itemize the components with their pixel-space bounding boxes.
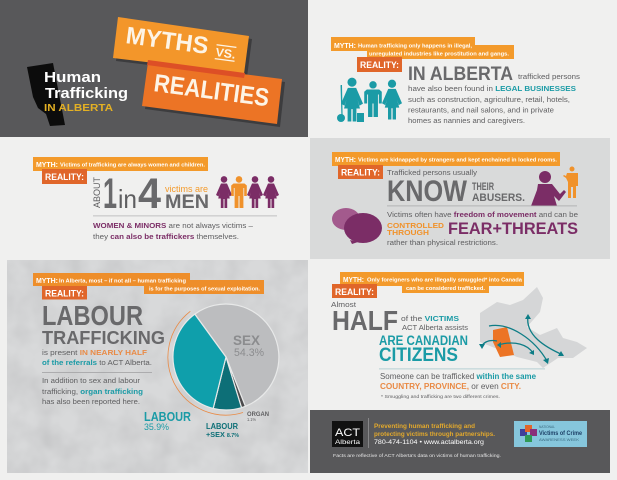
reality text: IN ALBERTA [408, 64, 513, 85]
icon: four people, one man [216, 176, 279, 208]
myth banner: MYTH: [343, 275, 364, 284]
reality text: such as construction, agriculture, retail, hotels, [408, 95, 570, 104]
labour trafficking text: LABOUR [42, 300, 143, 331]
trafficked within text: COUNTRY, PROVINCE, or even CITY. [380, 382, 521, 391]
icon: Alberta silhouette [27, 63, 65, 126]
fear and threats text: FEAR+THREATS [448, 219, 578, 238]
contact text: Preventing human trafficking and [374, 423, 475, 430]
know their abusers: KNOW [387, 175, 468, 208]
fear and threats text: rather than physical restrictions. [387, 238, 498, 247]
trafficked within text [380, 372, 537, 391]
logo: ACT Alberta: Alberta [335, 440, 361, 446]
organ trafficking text [42, 376, 143, 406]
myth banner: unregulated industries like prostitution and gangs. [369, 52, 509, 58]
reality text [93, 221, 254, 241]
reality tag: REALITY: [45, 288, 84, 300]
myth banner: In Alberta, most – if not all – human trafficking [59, 278, 187, 284]
reality text: homes as nannies and caregivers. [408, 116, 525, 125]
reality tag [42, 169, 87, 184]
pie labels: LABOUR [206, 422, 238, 431]
myth banner: MYTH: [36, 160, 58, 169]
reality text: trafficked persons [518, 72, 580, 81]
organ trafficking text: trafficking, organ trafficking [42, 387, 143, 396]
panel: footer [310, 410, 610, 473]
pie labels: ORGAN [247, 411, 269, 418]
organ trafficking text: has also been reported here. [42, 397, 140, 406]
reality text [408, 64, 580, 125]
reality text: restaurants, and nail salons, and in private [408, 106, 554, 114]
panel: illegal industries myth [331, 37, 580, 125]
statistic: about 1 in 4 victims are men: in [118, 184, 137, 214]
reality tag: REALITY: [341, 168, 380, 178]
almost half text: Almost [331, 300, 357, 309]
myth banner: Victims are kidnapped by strangers and kept enchained in locked rooms. [358, 158, 557, 164]
icon: victim and abuser [531, 166, 578, 206]
almost half text [331, 300, 468, 366]
almost half text: CITIZENS [379, 345, 458, 366]
heading: Human Trafficking in Alberta: IN ALBERTA [44, 103, 113, 114]
heading: Human Trafficking in Alberta [44, 69, 128, 114]
contact text [374, 423, 495, 446]
know their abusers: THEIR [472, 181, 494, 193]
pie labels [144, 332, 269, 439]
pie labels: 1.1% [247, 417, 256, 422]
organ trafficking text: In addition to sex and labour [42, 376, 140, 385]
pie chart [168, 304, 279, 415]
know their abusers: ABUSERS. [472, 192, 525, 204]
heading: Human Trafficking in Alberta: Human [44, 69, 101, 86]
panel: victims are women myth [33, 157, 279, 241]
reality tag: REALITY: [45, 172, 84, 183]
heading: Human Trafficking in Alberta: Trafficking [45, 85, 128, 102]
logo: National Victims of Crime Awareness Week: AWARENESS WEEK [539, 437, 579, 442]
trafficked within text: Someone can be trafficked within the same [380, 372, 537, 381]
myth banner: Only foreigners who are illegally smuggled* into Canada [367, 278, 523, 284]
reality tag: REALITY: [360, 60, 399, 71]
pie labels: SEX [233, 332, 261, 348]
pie labels: LABOUR [144, 409, 192, 424]
myth banner: can be considered trafficked. [406, 286, 485, 292]
pie labels: 35.9% [144, 422, 170, 433]
panel: sexual exploitation myth [7, 260, 308, 473]
know their abusers: Trafficked persons usually [387, 168, 477, 177]
reality text: they can also be traffickers themselves. [93, 232, 239, 241]
myth banner: Human trafficking only happens in illegal, [358, 44, 472, 50]
labour trafficking text [42, 300, 165, 367]
myth banner [33, 157, 208, 171]
labour trafficking text: of the referrals to ACT Alberta. [42, 358, 152, 367]
contact text: protecting victims through partnerships. [374, 431, 495, 438]
reality text: have also been found in LEGAL BUSINESSES [408, 84, 576, 93]
labour trafficking text: is present IN NEARLY HALF [42, 348, 147, 357]
logo: ACT Alberta [332, 421, 363, 447]
myth banner: Victims of trafficking are always women and children. [60, 162, 205, 168]
statistic: about 1 in 4 victims are men: 1 [103, 170, 117, 218]
logo: National Victims of Crime Awareness Week [514, 421, 587, 447]
sign: Myths vs. [113, 17, 252, 77]
myth banner [332, 152, 560, 166]
myth banner: MYTH: [36, 276, 58, 285]
panel: title banner [0, 0, 308, 137]
almost half text: of the VICTIMS [401, 314, 459, 323]
statistic: about 1 in 4 victims are men [92, 170, 209, 218]
statistic: about 1 in 4 victims are men: victims are [165, 184, 208, 195]
sign: Myths vs.: VS. [215, 45, 236, 62]
myth banner [331, 37, 514, 59]
almost half text: HALF [332, 305, 398, 336]
fear and threats text: Victims often have freedom of movement and can be [387, 210, 578, 219]
panel: foreigners myth [331, 272, 587, 399]
logo: National Victims of Crime Awareness Week: Victims of Crime [539, 430, 582, 437]
fear and threats text: THROUGH [387, 228, 429, 237]
logo: ACT Alberta: ACT [335, 427, 360, 439]
myth banner [33, 273, 264, 294]
icon: speech bubbles [332, 208, 382, 244]
know their abusers [387, 168, 525, 208]
icon: workers [337, 78, 402, 122]
statistic: about 1 in 4 victims are men: ABOUT [92, 177, 102, 208]
fear and threats text: CONTROLLED [387, 221, 445, 230]
contact text: 780-474-1104 • www.actalberta.org [374, 439, 484, 446]
almost half text: ARE CANADIAN [379, 333, 468, 348]
sign: Myths vs.: MYTHS [124, 22, 210, 60]
pie labels: 54.3% [234, 347, 264, 359]
statistic: about 1 in 4 victims are men: MEN [165, 192, 209, 213]
logo: National Victims of Crime Awareness Week: NATIONAL [539, 424, 556, 429]
myth banner [340, 272, 524, 293]
panel: kidnapped by strangers myth [310, 138, 610, 259]
fear and threats text [387, 210, 578, 247]
sign: Realities: REALITIES [152, 69, 271, 112]
footnote: * Smuggling and trafficking are two different crimes. [381, 394, 500, 399]
statistic: about 1 in 4 victims are men: 4 [138, 170, 161, 218]
myth banner: MYTH: [334, 41, 356, 50]
reality tag [357, 57, 402, 72]
labour trafficking text: TRAFFICKING [42, 328, 165, 348]
sign: Realities [142, 60, 285, 127]
reality text: WOMEN & MINORS are not always victims – [93, 221, 254, 230]
myth banner: MYTH: [335, 155, 356, 164]
pie labels: +SEX 8.7% [206, 430, 239, 439]
icon: map of Canada with arrows [479, 287, 587, 368]
reality tag: REALITY: [335, 287, 374, 298]
disclaimer: Facts are reflective of ACT Alberta's data on victims of human trafficking. [333, 453, 501, 458]
myth banner: is for the purposes of sexual exploitation. [149, 286, 260, 292]
almost half text: ACT Alberta assists [402, 323, 468, 332]
